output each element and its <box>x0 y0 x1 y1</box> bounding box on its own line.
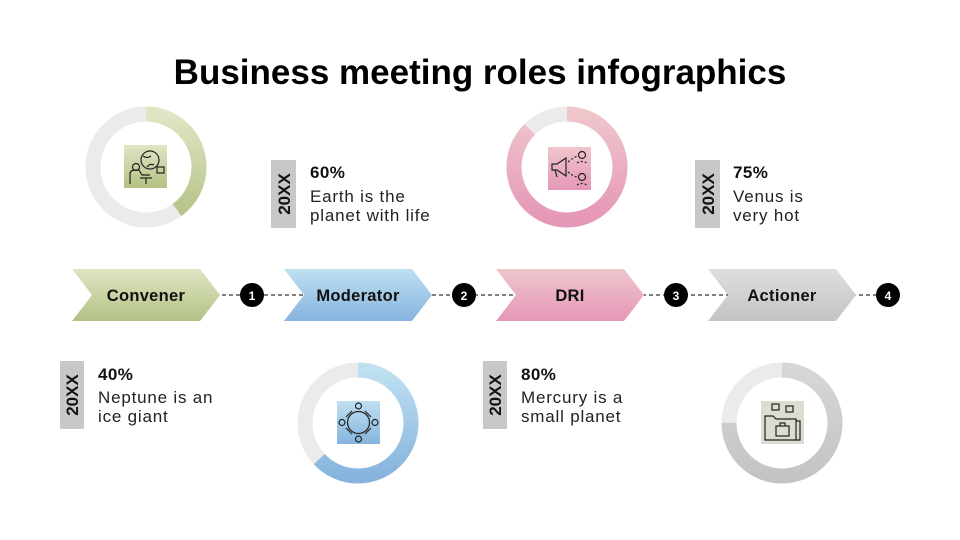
text block: 60%: Earth is the <box>310 187 406 206</box>
donut: Actioner <box>729 370 835 476</box>
text block: 60%: 20XX <box>275 173 294 215</box>
number 1 <box>240 283 264 307</box>
chevron: Moderator <box>284 269 432 321</box>
icon: globe and desk <box>124 145 167 188</box>
text block: 40%: ice giant <box>98 407 169 426</box>
donut: Convener <box>93 114 199 220</box>
text block: 75%: Venus is <box>733 187 804 206</box>
number 4 <box>876 283 900 307</box>
number 2 <box>452 283 476 307</box>
chevron: Convener <box>72 269 220 321</box>
icon: round table <box>337 401 380 444</box>
text block: 75% <box>695 160 804 228</box>
donut: Moderator <box>305 370 411 476</box>
icon: megaphone <box>548 147 591 190</box>
donut: DRI <box>514 114 620 220</box>
dashed timeline <box>215 294 890 296</box>
title: Business meeting roles infographics <box>174 53 786 92</box>
number 3 <box>664 283 688 307</box>
text block: 80%: 20XX <box>486 374 505 416</box>
icon: folder briefcase <box>761 401 804 444</box>
text block: 80% <box>483 361 623 429</box>
chevron: DRI <box>496 269 644 321</box>
text block: 75%: very hot <box>733 206 800 225</box>
text block: 40%: Neptune is an <box>98 388 213 407</box>
text block: 60% <box>271 160 431 228</box>
number 2: 2 <box>461 289 468 303</box>
number 1: 1 <box>249 289 256 303</box>
text block: 80%: 80% <box>521 365 556 384</box>
chevron: Convener: Convener <box>107 287 186 305</box>
number 4: 4 <box>885 289 892 303</box>
chevron: Moderator: Moderator <box>316 287 400 305</box>
chevron: DRI: DRI <box>555 287 585 305</box>
number 3: 3 <box>673 289 680 303</box>
text block: 40%: 20XX <box>63 374 82 416</box>
text block: 75%: 75% <box>733 163 768 182</box>
text block: 75%: 20XX <box>699 173 718 215</box>
text block: 60%: 60% <box>310 163 345 182</box>
text block: 80%: Mercury is a <box>521 388 623 407</box>
text block: 40%: 40% <box>98 365 133 384</box>
chevron: Actioner <box>708 269 856 321</box>
chevron: Actioner: Actioner <box>747 287 817 305</box>
text block: 60%: planet with life <box>310 206 431 225</box>
text block: 80%: small planet <box>521 407 621 426</box>
text block: 40% <box>60 361 213 429</box>
